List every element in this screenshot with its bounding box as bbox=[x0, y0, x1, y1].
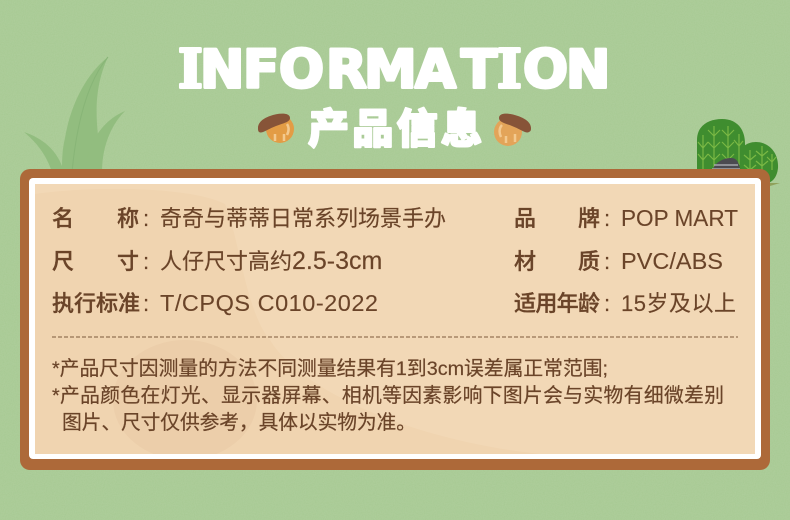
notes: *产品颜色在灯光、显示器屏幕、相机等因素影响下图片会与实物有细微差别 bbox=[52, 385, 724, 407]
panel: information card bbox=[20, 169, 770, 470]
row: product name bbox=[52, 201, 446, 233]
notes bbox=[52, 358, 724, 434]
row: age bbox=[514, 286, 736, 318]
row: product name: 奇奇与蒂蒂日常系列场景手办 bbox=[160, 206, 446, 231]
infographic canvas bbox=[20, 46, 780, 470]
row: age: : bbox=[604, 291, 610, 316]
row: material: : bbox=[604, 249, 610, 274]
notes: 图片、尺寸仅供参考，具体以实物为准。 bbox=[62, 412, 416, 434]
row: brand bbox=[514, 201, 738, 233]
row: brand: : bbox=[604, 206, 610, 231]
row: size bbox=[52, 244, 382, 276]
notes: *产品尺寸因测量的方法不同测量结果有1到3cm误差属正常范围; bbox=[52, 358, 608, 380]
title: INFORMATION: I bbox=[497, 38, 522, 100]
row: product name: : bbox=[143, 206, 149, 231]
card faint stump watermark bbox=[113, 340, 257, 454]
card brown frame bbox=[20, 169, 770, 470]
row: material: PVC/ABS bbox=[621, 248, 723, 274]
title: INFORMATION: NFORMAT bbox=[200, 40, 497, 100]
row: brand: 牌 bbox=[578, 201, 600, 233]
card beige surface bbox=[35, 184, 755, 454]
icon: bushes and rock bbox=[697, 119, 780, 186]
row: standard: 执行标准 bbox=[52, 286, 140, 318]
row: material: 质 bbox=[578, 244, 600, 276]
subtitle: 产品信息: 产品信息 bbox=[308, 95, 482, 155]
row: brand: POP MART bbox=[621, 205, 738, 231]
title: INFORMATION: I bbox=[178, 38, 203, 100]
icon: right acorn bbox=[494, 114, 531, 146]
row: standard bbox=[52, 286, 378, 318]
row: size: 人仔尺寸高约 bbox=[160, 249, 292, 274]
row: standard: : bbox=[143, 291, 149, 316]
row: age: 15岁及以上 bbox=[621, 291, 736, 316]
row: size: : bbox=[143, 249, 149, 274]
row: material: 材 bbox=[514, 244, 536, 276]
icon: left acorn bbox=[258, 114, 294, 143]
icon: grass bbox=[24, 57, 125, 172]
row: standard: T/CPQS C010-2022 bbox=[160, 290, 378, 316]
row: size: 寸 bbox=[117, 244, 139, 276]
row: size: 尺 bbox=[52, 244, 74, 276]
row: age: 适用年龄 bbox=[514, 286, 600, 318]
row: product name: 称 bbox=[117, 201, 139, 233]
row: product name: 名 bbox=[52, 201, 74, 233]
row: brand: 品 bbox=[514, 201, 536, 233]
title: INFORMATION: ON bbox=[523, 40, 610, 100]
card white border bbox=[29, 178, 761, 459]
row: material bbox=[514, 244, 723, 276]
row: size: 2.5-3cm bbox=[292, 247, 382, 275]
